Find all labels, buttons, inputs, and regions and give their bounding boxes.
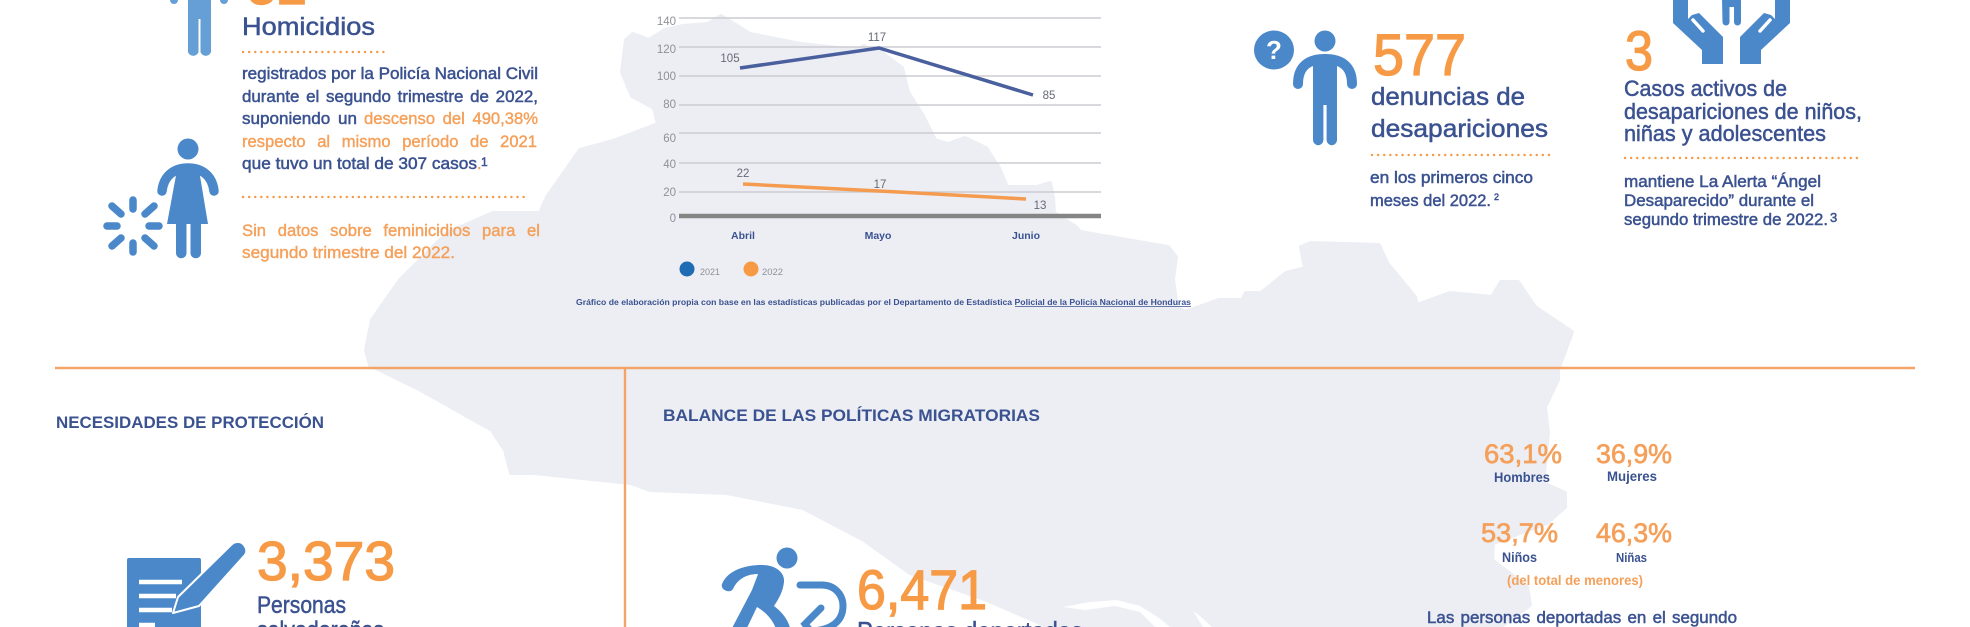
data labels: 85 <box>1043 90 1055 102</box>
text: homicides description: registrados por la Policía Nacional Civil <box>242 65 538 83</box>
text: homicides description: que tuvo un total de 307 casos <box>242 155 477 173</box>
text: deported people description: Las personas deportadas en el segundo <box>1427 609 1737 627</box>
stat: niñas: 46,3% <box>1596 518 1672 548</box>
stat: mujeres: Mujeres <box>1607 468 1657 484</box>
text: feminicidios note: segundo trimestre del 2022. <box>242 244 455 262</box>
stat: niños: 53,7% <box>1481 518 1558 548</box>
heading: homicidios: Homicidios <box>242 13 375 41</box>
icon: man <box>170 0 228 56</box>
number: 577: 577 <box>1373 23 1466 88</box>
data labels: 105 <box>720 53 740 65</box>
icon: runner with return arrow <box>722 548 843 627</box>
heading: denuncias: desapariciones <box>1371 115 1548 143</box>
heading: denuncias <box>1371 83 1548 143</box>
icon: document and pen <box>127 542 246 627</box>
text: homicides description: descenso del 490,38% <box>364 110 538 128</box>
icon: hands protecting child <box>1673 0 1790 64</box>
text: homicides description: . <box>477 155 482 173</box>
heading: denuncias: denuncias de <box>1371 83 1525 111</box>
heading: casos activos: Casos activos de <box>1624 76 1787 101</box>
heading: casos activos <box>1624 76 1862 146</box>
text: alerta description: 3 <box>1830 210 1837 225</box>
text: alerta description: Desaparecido” durante el <box>1624 192 1814 210</box>
section dividers <box>55 368 1915 627</box>
y axis labels <box>657 16 676 225</box>
y axis labels: 120 <box>657 44 676 56</box>
number: 3: 3 <box>1625 19 1653 82</box>
month labels: Junio <box>1012 230 1040 242</box>
legend: 2021 <box>700 267 720 278</box>
chart source caption: Gráfico de elaboración propia con base en las estadísticas publicadas por el Departamento de Estadística Policial de la Policía Nacional de Honduras <box>576 297 1191 307</box>
y axis labels: 140 <box>657 16 676 28</box>
panel: percentages of deported people <box>1427 439 1737 627</box>
heading: casos activos: niñas y adolescentes <box>1624 121 1826 146</box>
panel: feminicidios <box>107 138 540 262</box>
text: homicides description <box>242 65 538 173</box>
icon: person with question mark: ? <box>1266 35 1282 65</box>
background map of El Salvador <box>366 16 1572 627</box>
panel: denuncias de desapariciones <box>1254 23 1554 210</box>
heading: necesidades de protección: NECESIDADES DE PROTECCIÓN <box>56 413 324 432</box>
text: denuncias description <box>1370 169 1533 210</box>
icon: person with question mark <box>1254 30 1352 145</box>
panel: homicidios <box>170 0 538 173</box>
y axis labels: 0 <box>670 213 676 225</box>
text: feminicidios note <box>242 222 540 262</box>
text: homicides description: suponiendo un <box>242 110 357 128</box>
text: homicides description: 1 <box>481 155 488 169</box>
data labels: 13 <box>1034 200 1046 212</box>
stat: niñas <box>1596 518 1672 565</box>
number: 6,471: 6,471 <box>857 558 987 621</box>
text: alerta description: segundo trimestre de 2022. <box>1624 211 1828 229</box>
stat: niñas: Niñas <box>1616 551 1647 565</box>
legend: 2022 <box>762 267 783 278</box>
y axis labels: 100 <box>657 71 676 83</box>
text: alerta description <box>1624 172 1837 229</box>
number: 3,373: 3,373 <box>257 530 395 592</box>
stat: mujeres: 36,9% <box>1596 439 1672 469</box>
series 2021 <box>740 48 1033 95</box>
month labels: Mayo <box>865 230 891 242</box>
data labels: 22 <box>737 168 749 180</box>
panel: personas deportadas <box>722 548 1083 627</box>
y axis labels: 20 <box>663 187 676 199</box>
heading: casos activos: desapariciones de niños, <box>1624 99 1862 124</box>
stat: hombres: 63,1% <box>1484 439 1562 469</box>
heading: balance de las políticas migratorias: BALANCE DE LAS POLÍTICAS MIGRATORIAS <box>663 406 1040 425</box>
text: alerta description: mantiene La Alerta “Ángel <box>1624 172 1821 191</box>
stat: hombres: Hombres <box>1494 469 1550 485</box>
text: personas salvadoreñas: Personas <box>257 592 346 619</box>
y axis labels: 40 <box>663 159 676 171</box>
text: denuncias description: meses del 2022. <box>1370 192 1491 210</box>
y axis labels: 60 <box>663 133 676 145</box>
panel: alerta angel desaparecido <box>1624 0 1862 229</box>
icon: woman with burst <box>107 138 214 258</box>
text: homicides description: durante el segundo trimestre de 2022, <box>242 88 538 106</box>
month labels: Abril <box>731 230 755 242</box>
data labels: 117 <box>868 32 886 44</box>
month labels <box>731 230 1040 242</box>
data labels: 17 <box>874 179 886 191</box>
stat: niños <box>1481 518 1558 565</box>
note: del total de menores: (del total de menores) <box>1507 573 1643 588</box>
line chart: homicides 2021 vs 2022 <box>576 16 1191 307</box>
panel: solicitudes de protección <box>127 530 395 627</box>
data labels <box>720 32 1055 212</box>
text: denuncias description: en los primeros cinco <box>1370 169 1533 187</box>
stat: hombres <box>1484 439 1562 485</box>
series 2022 <box>743 184 1026 199</box>
text: homicides description: respecto al mismo período de 2021 <box>242 133 537 151</box>
stat: mujeres <box>1596 439 1672 484</box>
y axis labels: 80 <box>663 99 676 111</box>
stat: niños: Niños <box>1502 549 1537 565</box>
legend <box>680 262 783 278</box>
text: denuncias description: 2 <box>1494 192 1499 202</box>
text: personas salvadoreñas <box>257 592 384 627</box>
text: feminicidios note: Sin datos sobre feminicidios para el <box>242 222 540 240</box>
